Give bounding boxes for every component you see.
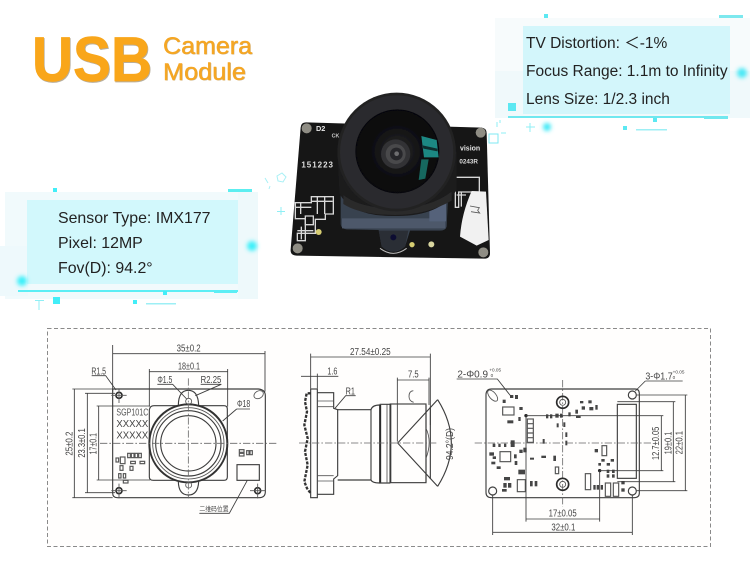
- title: USB Camera Module: Camera: [164, 34, 253, 61]
- dashed frame: technical drawings: [48, 328, 710, 546]
- silkscreen labels: XXXXX: [116, 431, 148, 442]
- dimension lines: [457, 379, 687, 535]
- dimension labels: 32±0.1: [551, 522, 575, 533]
- dimension labels: Φ18: [237, 399, 250, 410]
- dimension labels: +0.05: [489, 368, 502, 373]
- dimension labels: R1: [346, 387, 355, 398]
- lens spec text: TV Distortion: ＜-1%: [526, 35, 667, 52]
- lens spec text: [526, 35, 728, 108]
- title: USB Camera Module: [32, 24, 253, 96]
- dimension labels: R2.25: [201, 375, 221, 386]
- lens spec text: Focus Range: 1.1m to Infinity: [526, 63, 728, 80]
- drawing: back view: [457, 368, 687, 535]
- panel: sensor specifications: [0, 173, 286, 310]
- dimension labels: 35±0.2: [177, 344, 201, 355]
- dimension labels: 94.2°(D): [445, 428, 456, 460]
- drawing: side view: [299, 347, 456, 498]
- board markings: CK: [332, 133, 340, 139]
- dimension labels: 3-Φ1.7: [645, 371, 673, 382]
- board markings: D2: [316, 124, 325, 133]
- silkscreen labels: [116, 408, 149, 442]
- board markings: 0243R: [459, 158, 478, 165]
- dimension labels: 22±0.1: [675, 431, 686, 454]
- board markings: vision: [460, 145, 480, 152]
- sensor spec text: Pixel: 12MP: [58, 235, 143, 252]
- silkscreen components: [295, 177, 479, 241]
- title: USB Camera Module: Module: [164, 60, 247, 87]
- dimension labels: [327, 347, 456, 460]
- center line: [299, 442, 437, 444]
- photo: camera module: [291, 93, 490, 259]
- dimension labels: 18±0.1: [178, 361, 200, 372]
- QR code position: [237, 465, 259, 480]
- dimension labels: 12.7±0.05: [651, 427, 662, 460]
- dimension labels: 二维码位置: [199, 504, 229, 513]
- dimension labels: 17±0.05: [549, 509, 577, 520]
- white label: [460, 191, 489, 246]
- mounting holes: [111, 388, 265, 498]
- lens spec text: Lens Size: 1/2.3 inch: [526, 91, 670, 108]
- small pads: [116, 450, 252, 483]
- components: [500, 407, 619, 496]
- sensor holder: [341, 190, 448, 252]
- dimension labels: 23.3±0.1: [77, 428, 88, 458]
- dimension labels: 25±0.2: [65, 432, 76, 456]
- dimension labels: 2-Φ0.9: [457, 369, 488, 380]
- lens barrel: [337, 152, 457, 216]
- title: USB Camera Module: USB: [33, 25, 153, 96]
- sensor spec text: Sensor Type: IMX177: [58, 210, 211, 227]
- connector: [617, 404, 636, 478]
- dimension lines: [301, 354, 430, 442]
- dimension labels: 0: [673, 375, 676, 380]
- board markings: [301, 124, 480, 169]
- title: USB Camera Module: Camera: [163, 33, 252, 60]
- lens circles: [149, 390, 227, 495]
- holes: [489, 391, 636, 495]
- drawing: front view: [65, 344, 277, 513]
- dimension labels: [457, 368, 686, 533]
- sensor spec text: Fov(D): 94.2°: [58, 260, 153, 277]
- field of view: [398, 400, 451, 486]
- lens body: [311, 389, 430, 498]
- dimension labels: 17±0.1: [89, 433, 100, 454]
- dimension labels: 1.6: [327, 366, 337, 377]
- silkscreen labels: XXXXX: [116, 419, 148, 430]
- dimension labels: [65, 344, 250, 513]
- dimension labels: 19±0.1: [663, 432, 674, 454]
- board outline: [113, 389, 265, 498]
- lens reflection: [421, 136, 439, 157]
- components on back: [304, 393, 311, 493]
- panel: lens specifications: [489, 14, 750, 143]
- silkscreen labels: SGP101C: [116, 408, 149, 419]
- dimension labels: 27.54±0.25: [350, 347, 391, 358]
- lens front ring: [337, 93, 456, 211]
- center lines: [100, 378, 277, 498]
- dimension lines: [72, 345, 265, 513]
- circuit board: [291, 122, 490, 259]
- title: USB Camera Module: Module: [163, 59, 246, 86]
- center lines: [475, 380, 652, 507]
- dimension labels: +0.05: [673, 370, 685, 375]
- dimension labels: R1.5: [91, 366, 106, 377]
- dimension labels: Φ1.5: [157, 375, 172, 386]
- dimension labels: 0: [491, 373, 494, 378]
- title: USB Camera Module: USB: [32, 24, 152, 95]
- dimension labels: 7.5: [408, 369, 419, 380]
- sensor spec text: [58, 210, 211, 277]
- board outline: [486, 389, 639, 498]
- board markings: 151223: [301, 160, 334, 169]
